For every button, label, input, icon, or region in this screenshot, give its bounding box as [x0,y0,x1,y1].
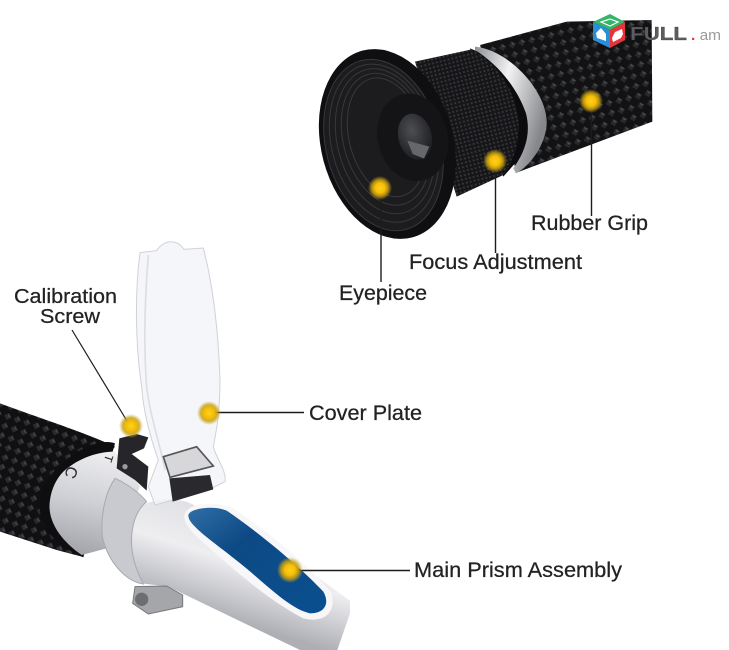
rubber grip [0,403,115,557]
rubber grip barrel [480,20,652,173]
logo domain: . am [691,27,721,44]
illustration: prism end of refractometer: T [101,453,115,463]
leader: focus adjustment [494,161,496,253]
illustration: eyepiece end of refractometer [299,20,652,254]
marker: cover plate [197,401,221,425]
transparent cover plate [136,242,225,505]
illustration: prism end of refractometer [0,242,350,650]
black grip band [40,442,115,557]
dark gap behind ring [470,48,530,177]
leader: eyepiece [380,190,382,282]
metal body tube [49,452,140,555]
label: calibration screw: Screw [40,306,101,328]
marker: calibration screw [119,414,143,438]
lens [393,110,437,163]
marker: main prism assembly [277,557,303,583]
label: calibration screw: Calibration [14,286,117,308]
watermark logo [593,14,721,48]
clamp screw [133,586,183,614]
calibration lever [117,434,148,491]
eyecup inner rings [305,46,461,244]
label: calibration screw [14,286,117,328]
label: eyepiece: Eyepiece [339,282,427,305]
logo wordmark: FULL [630,24,687,44]
white rim of prism [184,504,333,620]
rubber eyecup outer [299,34,476,254]
body label marks: C [60,463,80,481]
cover plate inner highlight [145,255,165,470]
label: rubber grip: Rubber Grip [531,212,648,235]
metal ring [475,47,547,173]
leader: main prism assembly [295,570,410,572]
logo cube icon [593,14,625,48]
leader: cover plate [212,412,304,414]
marker: eyepiece [368,176,392,200]
label: cover plate: Cover Plate [309,402,422,425]
inner eyecup disc [368,86,457,189]
leader: calibration screw [72,330,127,421]
collar [102,478,147,584]
blue prism window [188,508,326,613]
focus adjustment collar [415,49,519,197]
cover hinge [163,447,213,502]
label: focus adjustment: Focus Adjustment [409,251,582,274]
marker: focus adjustment [483,149,507,173]
leader: rubber grip [590,101,592,216]
label: main prism assembly: Main Prism Assembly [414,559,623,582]
tapered prism housing [128,499,350,650]
marker: rubber grip [579,89,603,113]
